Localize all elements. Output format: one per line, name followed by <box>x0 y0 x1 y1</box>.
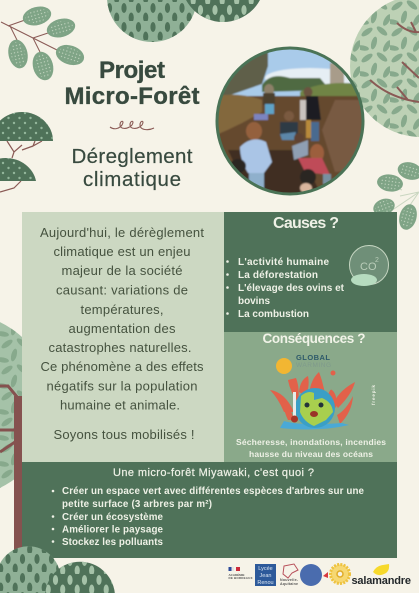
panel list: Créer un espace vert avec différentes espèces d'arbres sur une <box>62 486 365 497</box>
decoration: left bonsai tree <box>0 112 53 192</box>
consequences text <box>236 437 386 459</box>
decoration: top-right tree <box>350 0 419 137</box>
panel list: Créer un écosystème <box>62 512 164 523</box>
image credit: freepik <box>371 385 376 405</box>
logo: salamandre: salamandre <box>352 575 411 587</box>
intro text: causant: variations de <box>56 282 188 298</box>
icon: CO2 cloud: 2 <box>375 257 379 264</box>
intro text: catastrophes naturelles. <box>48 340 192 355</box>
panel list <box>52 486 365 548</box>
title: Projet <box>99 57 165 84</box>
intro text <box>40 225 204 442</box>
intro text: températures, <box>80 302 164 317</box>
subtitle <box>72 145 193 191</box>
logo: lycée Jean Renou: Jean <box>260 573 271 579</box>
subtitle: climatique <box>83 168 181 191</box>
divider squiggle <box>110 121 154 130</box>
panel list: Stockez les polluants <box>62 537 164 548</box>
people <box>264 84 274 96</box>
intro text: négatifs sur la population <box>46 378 198 394</box>
illustration: melting Earth <box>270 353 355 429</box>
logo: Nouvelle-Aquitaine: Aquitaine <box>280 582 298 586</box>
panel list: Améliorer le paysage <box>62 524 164 536</box>
causes list: La combustion <box>238 309 309 320</box>
logo: blue circle <box>300 564 328 586</box>
title <box>64 57 200 110</box>
logo: Nouvelle-Aquitaine <box>280 564 299 586</box>
causes list: bovins <box>238 296 270 307</box>
panel: introduction <box>22 212 224 463</box>
decoration: bottom-left round trees <box>0 546 115 593</box>
panel: consequences <box>224 331 397 462</box>
photo: students planting trees <box>216 47 364 197</box>
decoration: left tree with trunk <box>0 313 52 554</box>
intro text: Aujourd'hui, le dérèglement <box>40 225 204 240</box>
intro text: climatique est un enjeu <box>54 244 190 259</box>
logo: académie de Bordeaux: ACADÉMIE <box>228 572 245 577</box>
logo: lycée Jean Renou <box>255 564 276 586</box>
subtitle: Déreglement <box>72 145 193 168</box>
panel list: petite surface (3 arbres par m²) <box>62 499 212 510</box>
logo: lycée Jean Renou: Renou <box>257 580 274 586</box>
icon: CO2 cloud <box>350 246 388 286</box>
consequences heading: Conséquences ? <box>262 331 366 346</box>
logo: académie de Bordeaux: DE BORDEAUX <box>228 576 252 580</box>
partner logos <box>228 564 411 587</box>
illustration: melting Earth: GLOBAL <box>296 353 330 362</box>
logo: Nouvelle-Aquitaine: Nouvelle- <box>280 578 299 582</box>
panel: what is a Miyawaki micro-forest <box>22 462 397 558</box>
causes list: L'élevage des ovins et <box>238 283 345 294</box>
illustration: melting Earth: WARMING <box>296 362 331 369</box>
consequences text: Sécheresse, inondations, incendies <box>236 437 386 447</box>
panel heading: Une micro-forêt Miyawaki, c'est quoi ? <box>113 467 314 479</box>
intro text: humaine et animale. <box>60 398 180 412</box>
logo: Rotary <box>330 564 350 584</box>
intro text: majeur de la société <box>62 263 182 278</box>
intro text: Ce phénomène a des effets <box>40 359 204 374</box>
title: Micro-Forêt <box>64 83 200 110</box>
consequences text: hausse du niveau des océans <box>249 449 373 459</box>
logo: salamandre <box>352 564 411 587</box>
icon: CO2 cloud: CO <box>360 261 377 273</box>
decoration: top round trees <box>107 0 265 42</box>
intro text: augmentation des <box>68 321 176 336</box>
causes list: La déforestation <box>238 270 318 281</box>
logo: académie de Bordeaux <box>228 567 252 580</box>
decoration: right leafy branch <box>371 160 419 232</box>
causes list <box>226 257 345 320</box>
causes list: L'activité humaine <box>238 257 329 268</box>
causes heading: Causes ? <box>273 215 339 232</box>
panel: causes <box>224 212 397 332</box>
decoration: top-left leafy branch <box>1 4 87 83</box>
logo: lycée Jean Renou: Lycée <box>258 566 273 572</box>
intro text: Soyons tous mobilisés ! <box>54 427 194 442</box>
